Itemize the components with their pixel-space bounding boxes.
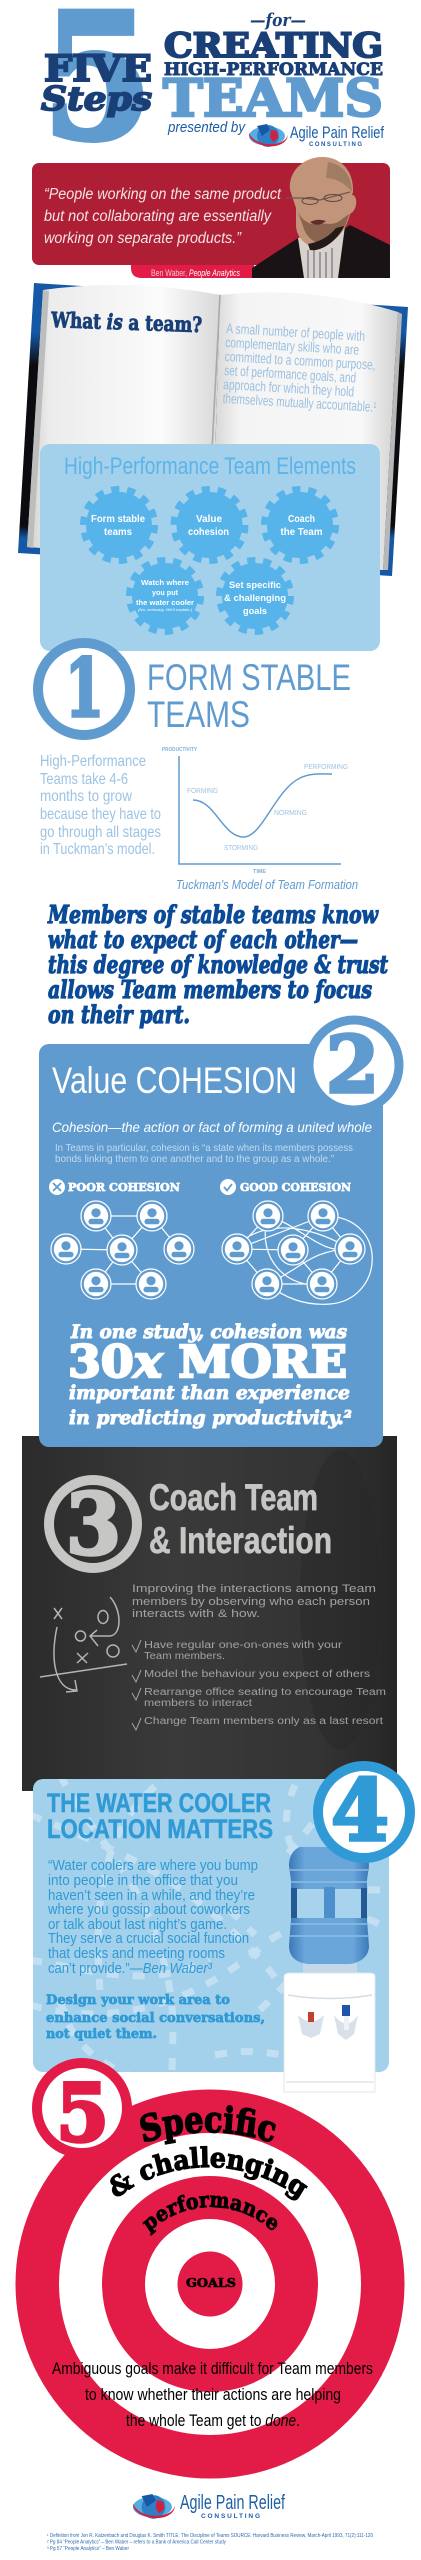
explanation: bonds linking them to one another and to the group as a whole.” bbox=[55, 1153, 334, 1165]
curved word: performance: performance bbox=[142, 2194, 278, 2236]
gear: value cohesion: cohesion bbox=[188, 527, 229, 538]
gear: value cohesion bbox=[174, 490, 244, 560]
gear: coach the team: the Team bbox=[280, 527, 323, 538]
center word: goals: GOALS bbox=[186, 2276, 236, 2290]
paragraph: High-Performance bbox=[40, 753, 146, 770]
diagram: poor cohesion: POOR COHESION bbox=[68, 1181, 180, 1194]
gear: specific goals bbox=[220, 561, 290, 631]
paragraph: months to grow bbox=[40, 788, 132, 805]
chart: tuckman model: TIME bbox=[253, 869, 267, 875]
chart: tuckman model: Tuckman’s Model of Team Formation bbox=[176, 877, 358, 892]
paragraph: go through all stages bbox=[40, 824, 161, 841]
portrait bbox=[252, 157, 390, 278]
body text bbox=[52, 2360, 373, 2430]
paragraph: in Tuckman’s model. bbox=[40, 841, 155, 858]
heading: TEAMS bbox=[147, 694, 250, 735]
book pages bbox=[27, 285, 402, 570]
pull quote: stable teams: on their part. bbox=[48, 1000, 190, 1029]
heading: THE WATER COOLER bbox=[47, 1788, 271, 1818]
footer logo bbox=[133, 2492, 285, 2520]
panel: quote bbox=[32, 157, 390, 278]
attribution tab bbox=[131, 265, 254, 278]
number badge 2: 2 bbox=[326, 1020, 379, 1111]
callout: 30x more bbox=[68, 1321, 352, 1429]
body text: the whole Team get to done. bbox=[126, 2412, 300, 2430]
callout: 30x more: 30x MORE bbox=[68, 1337, 347, 1388]
paragraph: Teams take 4-6 bbox=[40, 771, 128, 788]
number badge 2 bbox=[309, 1020, 399, 1111]
word FIVE: FIVE bbox=[44, 48, 152, 90]
section 5: target bbox=[16, 2058, 404, 2478]
number badge 3: 3 bbox=[66, 1475, 121, 1574]
curved word: challenging: & challenging bbox=[110, 2146, 308, 2200]
panel: blackboard section 3 bbox=[22, 1436, 397, 1791]
gear: form stable teams bbox=[84, 490, 154, 560]
heading bbox=[149, 1477, 332, 1561]
quote text bbox=[44, 186, 282, 247]
word for: —for— bbox=[250, 10, 306, 31]
quote text: “Water coolers are where you bump bbox=[48, 1857, 258, 1874]
definition: Cohesion—the action or fact of forming a united whole bbox=[52, 1119, 372, 1135]
logo: agile pain relief: Agile Pain Relief bbox=[290, 123, 384, 142]
checklist: Rearrange office seating to encourage Team bbox=[144, 1687, 386, 1698]
paragraph bbox=[40, 753, 161, 858]
chart: tuckman model: STORMING bbox=[224, 845, 258, 852]
quote text: working on separate products.” bbox=[44, 230, 242, 247]
curved word: specific: Specific bbox=[140, 2104, 276, 2145]
number badge 3 bbox=[49, 1475, 137, 1574]
callout: 30x more: important than experience bbox=[69, 1382, 350, 1404]
explanation bbox=[55, 1142, 353, 1165]
number badge 5 bbox=[37, 2063, 127, 2160]
heading: & Interaction bbox=[149, 1520, 332, 1561]
presented by: presented by bbox=[167, 119, 246, 136]
chart: tuckman model: PRODUCTIVITY bbox=[162, 747, 198, 753]
definition text bbox=[222, 320, 377, 415]
gear: specific goals: & challenging bbox=[224, 593, 286, 604]
quote text: where you gossip about coworkers bbox=[47, 1901, 250, 1918]
number badge 1: 1 bbox=[65, 641, 104, 735]
number badge 1 bbox=[38, 641, 130, 735]
footnotes bbox=[47, 2533, 373, 2552]
number badge 4: 4 bbox=[331, 1761, 389, 1860]
definition text: set of performance goals, and bbox=[224, 362, 357, 386]
call to action: enhance social conversations, bbox=[46, 2011, 265, 2026]
logo: agile pain relief bbox=[249, 123, 384, 148]
gear: watch the water cooler: the water cooler bbox=[136, 598, 194, 607]
number badge 4 bbox=[318, 1761, 410, 1860]
callout: 30x more: In one study, cohesion was bbox=[70, 1321, 347, 1343]
chart: tuckman model: PERFORMING bbox=[304, 764, 348, 771]
quote text: haven’t seen in a while, and they’re bbox=[48, 1887, 255, 1904]
chart: tuckman model bbox=[162, 747, 358, 892]
word HIGH-PERFORMANCE: HIGH-PERFORMANCE bbox=[164, 60, 383, 80]
heading bbox=[147, 657, 351, 735]
gear: specific goals: goals bbox=[243, 606, 267, 617]
body text: to know whether their actions are helping bbox=[85, 2386, 341, 2404]
heading: LOCATION MATTERS bbox=[47, 1814, 273, 1844]
checklist bbox=[132, 1640, 386, 1730]
quote text: or talk about last night’s game. bbox=[48, 1916, 227, 1933]
gear: form stable teams: Form stable bbox=[91, 514, 145, 525]
gear: form stable teams: teams bbox=[104, 527, 132, 538]
pull quote: stable teams bbox=[47, 900, 388, 1029]
heading: High-Performance Team Elements bbox=[64, 453, 356, 480]
definition text: approach for which they hold bbox=[223, 376, 355, 400]
call to action: Design your work area to bbox=[46, 1993, 230, 2008]
heading: FORM STABLE bbox=[147, 657, 351, 698]
quote text: into people in the office that you bbox=[48, 1872, 238, 1889]
checklist: Have regular one-on-ones with your bbox=[144, 1640, 343, 1651]
play diagram bbox=[40, 1597, 127, 1692]
intro text bbox=[132, 1583, 376, 1620]
heading: what is a team: What is a team? bbox=[50, 307, 203, 337]
heading: Coach Team bbox=[149, 1477, 318, 1518]
checklist: Team members. bbox=[144, 1651, 225, 1662]
gear: watch the water cooler bbox=[130, 561, 200, 631]
chart: target rings bbox=[16, 2090, 404, 2478]
intro text: members by observing who each person bbox=[132, 1596, 370, 1608]
gear: watch the water cooler: you put bbox=[152, 588, 178, 597]
definition text: A small number of people with bbox=[226, 320, 366, 344]
word CREATING: CREATING bbox=[164, 26, 383, 66]
footer logo: Agile Pain Relief bbox=[180, 2492, 285, 2514]
explanation: In Teams in particular, cohesion is “a state when its members possess bbox=[55, 1142, 353, 1154]
heading: Value COHESION bbox=[52, 1060, 297, 1101]
title: five steps bbox=[41, 0, 384, 180]
definition text: complementary skills who are bbox=[225, 334, 360, 358]
gear: value cohesion: Value bbox=[196, 514, 222, 525]
panel: section 4 water cooler bbox=[30, 1761, 410, 2092]
diagram: poor cohesion bbox=[49, 1179, 194, 1299]
quote text: that desks and meeting rooms bbox=[48, 1945, 225, 1962]
quote text: They serve a crucial social function bbox=[48, 1930, 249, 1947]
checklist: Model the behaviour you expect of others bbox=[144, 1669, 370, 1680]
number badge 5: 5 bbox=[56, 2066, 109, 2160]
paragraph: because they have to bbox=[40, 806, 161, 823]
chart: tuckman model: FORMING bbox=[187, 788, 218, 795]
word Steps: Steps bbox=[41, 79, 152, 118]
footnotes: ¹ Definition from Jon R. Katzenbach and Douglas K. Smith TITLE: The Discipline of Teams SOURCE: Harvard Business Review, March-April 1993, 71(2):111-120 bbox=[47, 2533, 373, 2539]
panel: book bbox=[18, 283, 408, 576]
quote text: but not collaborating are essentially bbox=[44, 208, 272, 225]
panel: section 2 value cohesion bbox=[39, 1020, 399, 1447]
checklist: members to interact bbox=[144, 1698, 252, 1709]
gear: specific goals: Set specific bbox=[229, 580, 281, 591]
panel: high-performance team elements bbox=[40, 444, 380, 651]
gear: watch the water cooler: (No, seriously. We'll explain.) bbox=[138, 607, 193, 612]
footnotes: ² Pg 84 “People Analytics” – Ben Waber – refers to a Bank of America Call Center study bbox=[47, 2540, 226, 2546]
quote text bbox=[47, 1857, 258, 1977]
call to action: not quiet them. bbox=[46, 2027, 157, 2042]
gear: coach the team: Coach bbox=[288, 514, 315, 525]
word TEAMS: TEAMS bbox=[163, 69, 383, 129]
logo: agile pain relief: CONSULTING bbox=[309, 142, 362, 148]
attribution tab: Ben Waber, People Analytics bbox=[151, 268, 240, 278]
call to action bbox=[46, 1993, 265, 2042]
intro text: Improving the interactions among Team bbox=[132, 1583, 376, 1595]
gear: coach the team bbox=[265, 490, 335, 560]
diagram: good cohesion: GOOD COHESION bbox=[240, 1181, 351, 1194]
footer logo: CONSULTING bbox=[201, 2513, 260, 2520]
intro text: interacts with & how. bbox=[132, 1608, 260, 1620]
quote text: can’t provide.”—Ben Waber³ bbox=[48, 1960, 213, 1977]
chart: tuckman model: NORMING bbox=[274, 810, 307, 817]
callout: 30x more: in predicting productivity.² bbox=[69, 1407, 352, 1429]
gear: watch the water cooler: Watch where bbox=[141, 578, 189, 587]
section 1: form stable teams bbox=[38, 641, 358, 892]
icon: water cooler bbox=[284, 1847, 375, 2092]
footnotes: ³ Pg 57 “People Analytics” – Ben Waber bbox=[47, 2546, 129, 2552]
book cover bbox=[18, 283, 408, 576]
diagram: good cohesion bbox=[220, 1179, 372, 1304]
quote text: “People working on the same product bbox=[44, 186, 282, 203]
heading bbox=[47, 1788, 273, 1844]
checklist: Change Team members only as a last resort bbox=[144, 1716, 383, 1727]
